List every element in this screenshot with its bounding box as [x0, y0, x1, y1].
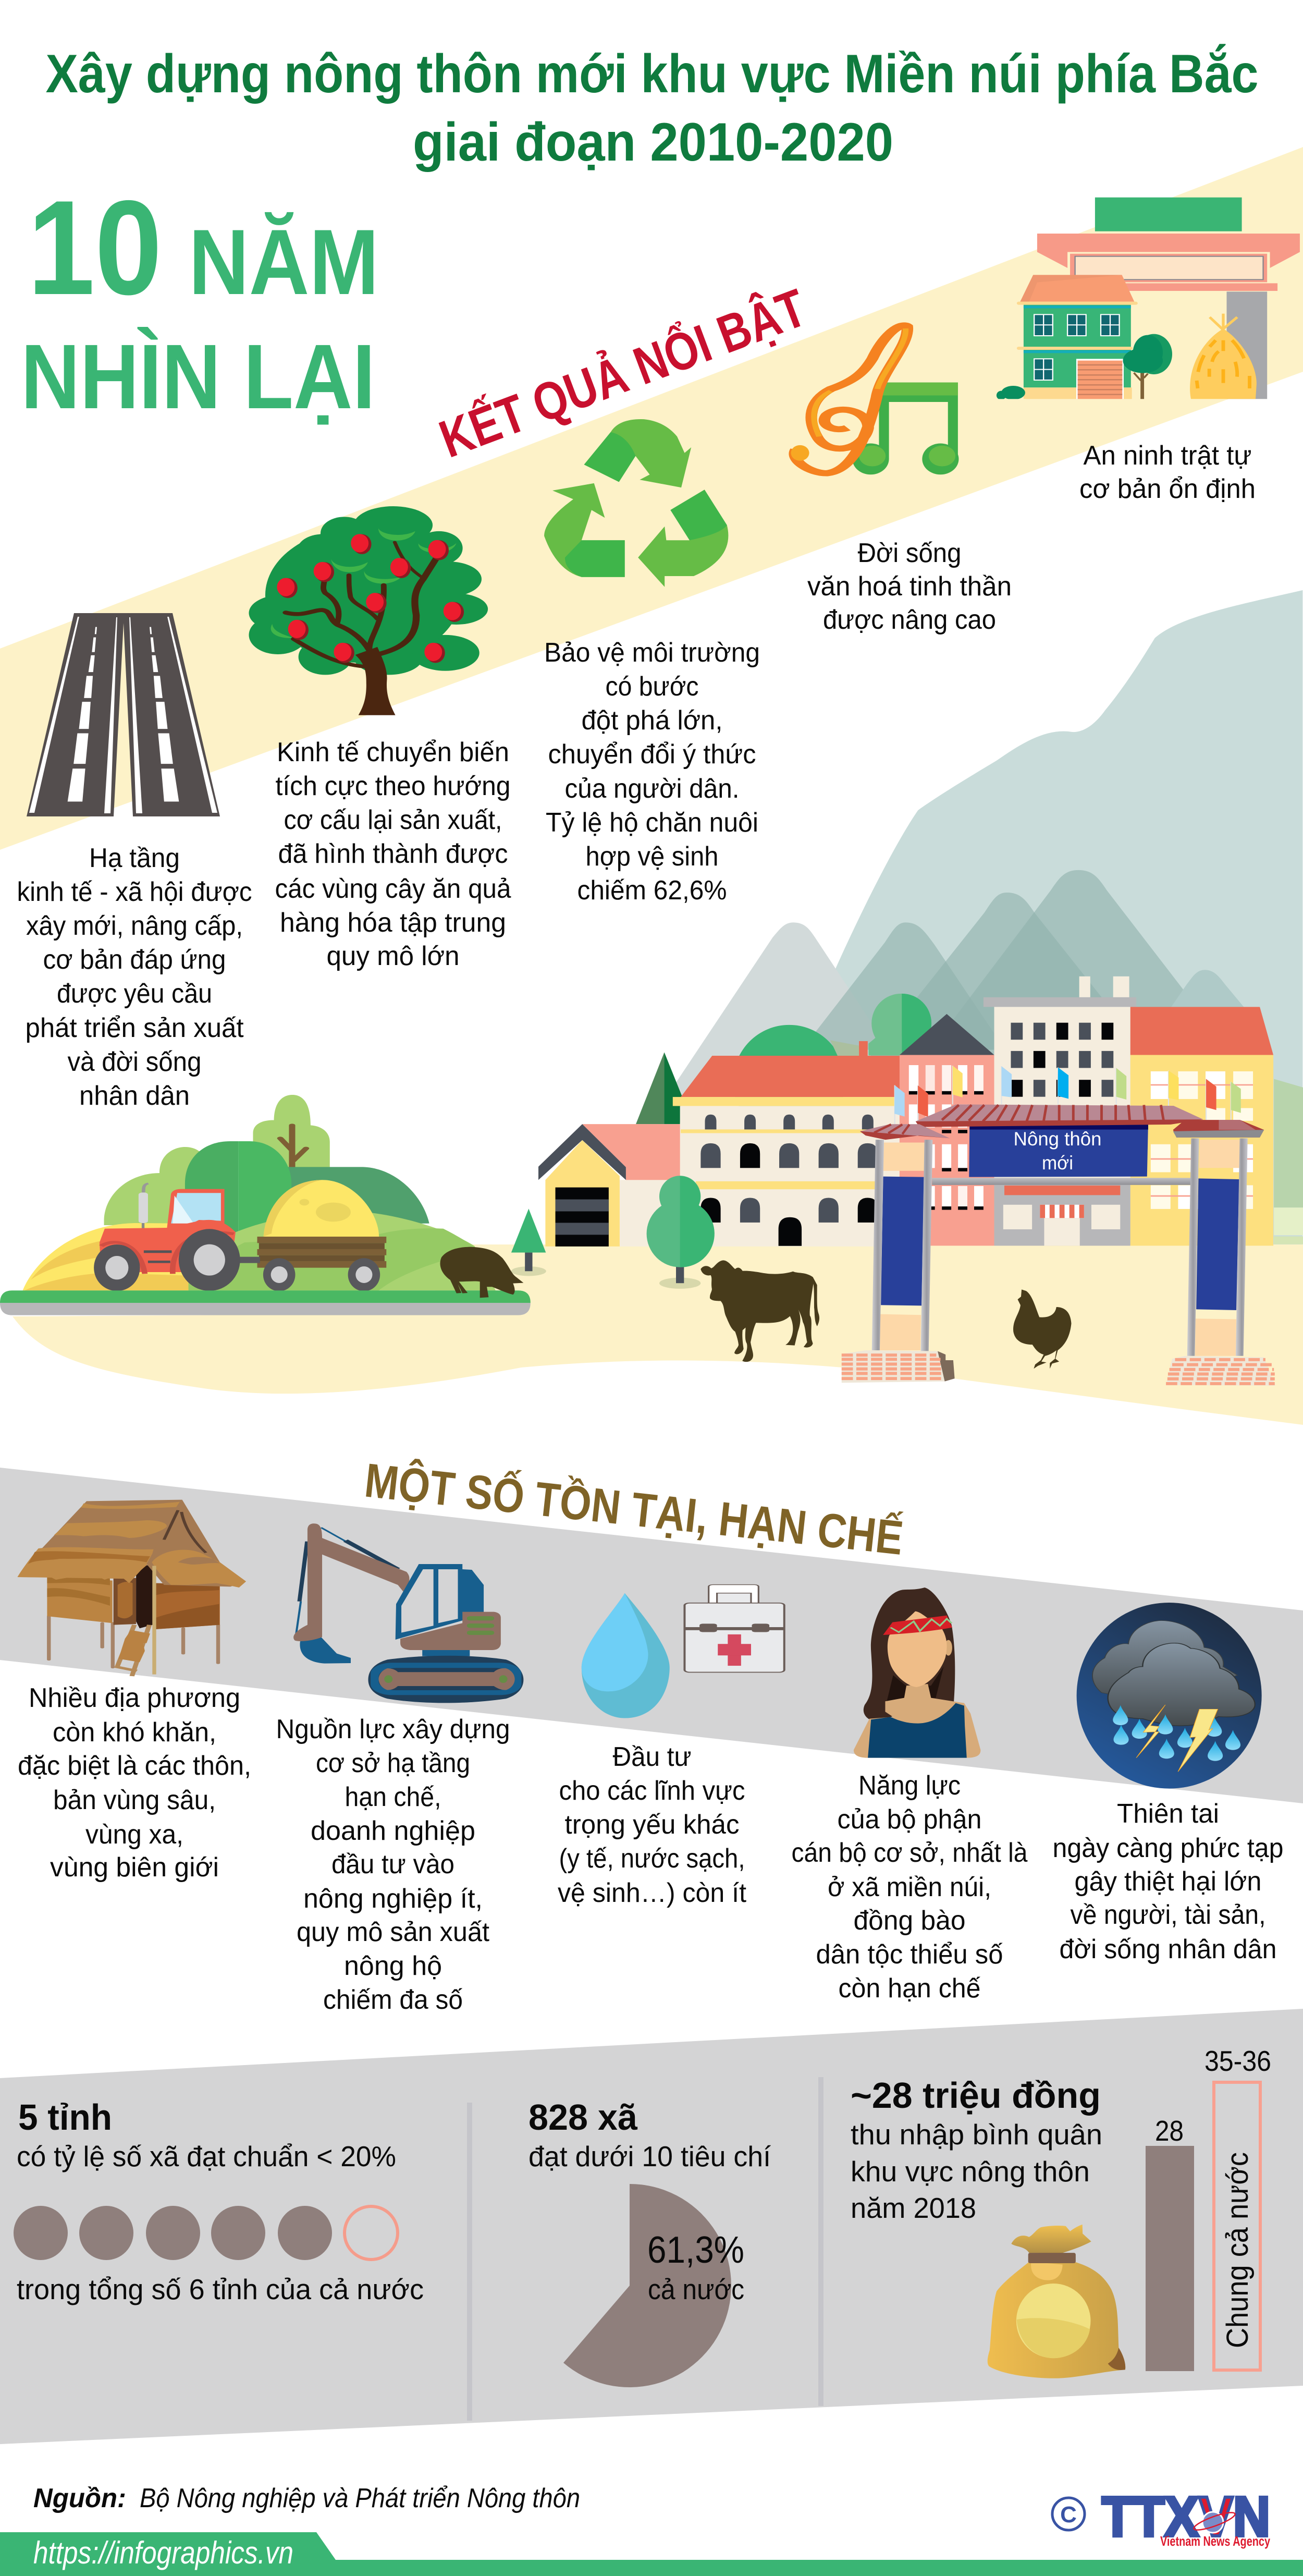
headline: 10 năm nhìn lại: 10 — [28, 172, 162, 323]
text: năng lực: của bộ phận — [837, 1804, 982, 1835]
text: nhiều địa phương: vùng biên giới — [50, 1852, 219, 1883]
flags — [894, 1066, 1241, 1124]
text: đầu tư — [558, 1742, 747, 1908]
text: năng lực — [791, 1771, 1028, 2004]
text: hạ tầng: xây mới, nâng cấp, — [26, 911, 243, 941]
panel: 828 xã: cả nước — [648, 2273, 744, 2305]
text: hạ tầng: kinh tế - xã hội được — [17, 877, 252, 907]
text: đời sống văn hoá — [807, 538, 1012, 635]
text: đầu tư: Đầu tư — [613, 1742, 691, 1772]
text: năng lực: Năng lực — [858, 1771, 961, 1801]
text: nguồn lực: hạn chế, — [345, 1782, 441, 1812]
title: giai đoạn 2010-2020 — [413, 112, 893, 173]
icon: excavator — [293, 1523, 523, 1703]
icon: storm — [1077, 1603, 1262, 1789]
icon: recycling arrows — [544, 419, 728, 587]
text: nguồn lực: chiếm đa số — [323, 1985, 463, 2015]
front tree — [511, 1176, 715, 1289]
text: bảo vệ môi trường: chuyển đổi ý thức — [548, 739, 756, 770]
gate sign text: mới — [1042, 1152, 1073, 1174]
source: Bộ Nông nghiệp và Phát triển Nông thôn — [140, 2483, 580, 2513]
text: nguồn lực: quy mô sản xuất — [297, 1917, 490, 1947]
footer bar: https://infographics.vn — [33, 2535, 293, 2570]
text: an ninh trật tự: cơ bản ổn định — [1079, 474, 1256, 504]
divider — [818, 2077, 823, 2406]
icon: stilt hut — [17, 1500, 246, 1676]
text: hạ tầng — [17, 843, 252, 1111]
text: nhiều địa phương: Nhiều địa phương — [29, 1683, 240, 1713]
text: hạ tầng: và đời sống — [68, 1047, 201, 1077]
text: hạ tầng: cơ bản đáp ứng — [43, 945, 226, 975]
panel: thu nhập bình quân: khu vực nông thôn — [851, 2155, 1090, 2188]
text: bảo vệ môi trường: của người dân. — [565, 774, 739, 804]
text: bảo vệ môi trường: Bảo vệ môi trường — [544, 638, 760, 668]
bar chart: income: 28 — [1155, 2115, 1184, 2147]
text: đầu tư: trọng yếu khác — [565, 1810, 739, 1840]
logo: TTXVN: TTXVN — [1102, 2485, 1270, 2548]
roofs — [916, 1104, 1203, 1126]
text: nhiều địa phương: bản vùng sâu, — [53, 1785, 216, 1815]
icon: toll gate, house and haystack — [996, 198, 1300, 401]
panel: 828 xã — [528, 2097, 771, 2387]
text: nhiều địa phương: còn khó khăn, — [53, 1717, 216, 1748]
text: nhiều địa phương — [18, 1683, 251, 1883]
panel: thu nhập bình quân: thu nhập bình quân — [851, 2118, 1102, 2151]
text: hạ tầng: nhân dân — [79, 1081, 190, 1111]
text: đầu tư: cho các lĩnh vực — [559, 1776, 745, 1806]
text: hạ tầng: được yêu cầu — [57, 979, 212, 1009]
text: nguồn lực: nông hộ — [344, 1951, 442, 1981]
text: bảo vệ môi trường — [544, 638, 760, 906]
text: năng lực: dân tộc thiểu số — [816, 1939, 1003, 1970]
text: kinh tế chuyển biến: quy mô lớn — [326, 941, 460, 971]
text: nguồn lực: đầu tư vào — [331, 1849, 454, 1879]
icon: money bag — [988, 2225, 1125, 2378]
text: đời sống văn hoá: được nâng cao — [823, 605, 996, 635]
text: đời sống văn hoá: văn hoá tinh thần — [807, 571, 1012, 602]
ground — [13, 1244, 1303, 1425]
text: thiên tai: đời sống nhân dân — [1059, 1934, 1277, 1964]
headline: 10 năm nhìn lại: NHÌN LẠI — [21, 326, 375, 428]
text: bảo vệ môi trường: Tỷ lệ hộ chăn nuôi — [546, 808, 758, 838]
background band: results — [0, 147, 1303, 850]
bar chart: income — [1146, 2045, 1271, 2371]
gate sign text: Nông thôn — [1013, 1128, 1102, 1150]
text: bảo vệ môi trường: hợp vệ sinh — [586, 841, 718, 872]
icon: cow — [700, 1260, 819, 1362]
gate sign text — [1013, 1128, 1102, 1174]
brick bases — [842, 1350, 1275, 1386]
panel: thu nhập bình quân: năm 2018 — [851, 2192, 976, 2224]
text: kinh tế chuyển biến: đã hình thành được — [278, 839, 508, 869]
icon: ethnic woman — [854, 1588, 980, 1758]
footer bar — [0, 2532, 1303, 2576]
sign board — [969, 1124, 1148, 1177]
icon: music notes — [791, 325, 958, 474]
panel: thu nhập bình quân — [851, 2045, 1271, 2378]
illustration: farm with tractor — [0, 1095, 531, 1315]
text: nhiều địa phương: vùng xa, — [85, 1820, 183, 1850]
town buildings — [868, 976, 1273, 1246]
text: bảo vệ môi trường: có bước — [606, 672, 698, 702]
text: đời sống văn hoá: Đời sống — [858, 538, 961, 568]
text: nguồn lực: cơ sở hạ tầng — [316, 1748, 470, 1778]
panel: 828 xã: đạt dưới 10 tiêu chí — [528, 2140, 771, 2172]
school building and garage — [538, 1025, 903, 1247]
icon: pig — [440, 1247, 523, 1298]
source: Nguồn: — [33, 2483, 126, 2513]
text: nguồn lực: doanh nghiệp — [311, 1816, 475, 1846]
text: năng lực: còn hạn chế — [838, 1973, 981, 2004]
text: an ninh trật tự — [1079, 441, 1256, 504]
heading: kết quả nổi bật: KẾT QUẢ NỔI BẬT — [432, 278, 814, 469]
text: kinh tế chuyển biến: hàng hóa tập trung — [280, 908, 506, 938]
text: an ninh trật tự: An ninh trật tự — [1083, 441, 1252, 471]
background bands: limitations and statistics — [0, 1468, 1303, 2444]
divider — [467, 2103, 472, 2421]
text: nguồn lực — [276, 1714, 510, 2015]
icon: hen — [1013, 1289, 1071, 1369]
text: nguồn lực: Nguồn lực xây dựng — [276, 1714, 510, 1744]
dot chart: 5 of 6 provinces — [14, 2206, 398, 2260]
panel: 5 tỉnh: trong tổng số 6 tỉnh của cả nước — [17, 2273, 424, 2305]
panel: 828 xã: 61,3% — [647, 2229, 744, 2271]
icon: water drop and medical kit — [582, 1585, 784, 1718]
text: hạ tầng: Hạ tầng — [89, 843, 180, 873]
mountains — [665, 590, 1302, 1247]
text: hạ tầng: phát triển sản xuất — [25, 1013, 244, 1043]
text: thiên tai — [1053, 1799, 1283, 1964]
right meadow — [1274, 1079, 1303, 1244]
text: nguồn lực: nông nghiệp ít, — [303, 1884, 483, 1914]
text: năng lực: cán bộ cơ sở, nhất là — [791, 1838, 1028, 1868]
text: đầu tư: vệ sinh…) còn ít — [558, 1878, 747, 1908]
illustration: village buildings — [511, 976, 1303, 1289]
logo: TTXVN: C — [1060, 2502, 1077, 2528]
logo: TTXVN: Vietnam News Agency — [1160, 2533, 1270, 2549]
panel: 828 xã: 828 xã — [528, 2097, 638, 2138]
panel: 5 tỉnh — [14, 2097, 424, 2305]
text: kinh tế chuyển biến: cơ cấu lại sản xuất, — [284, 805, 502, 835]
text: kinh tế chuyển biến: tích cực theo hướng — [275, 771, 511, 801]
headline: 10 năm nhìn lại — [21, 172, 379, 428]
panel: thu nhập bình quân: ~28 triệu đồng — [851, 2075, 1101, 2116]
text: năng lực: ở xã miền núi, — [828, 1872, 991, 1902]
heading: một số tồn tại, hạn chế: MỘT SỐ TỒN TẠI, HẠN CHẾ — [362, 1453, 906, 1565]
pie chart: 61,3% — [563, 2184, 731, 2387]
text: năng lực: đồng bào — [854, 1906, 965, 1936]
text: kinh tế chuyển biến — [275, 737, 511, 971]
panel: 5 tỉnh: có tỷ lệ số xã đạt chuẩn < 20% — [17, 2140, 396, 2172]
bar chart: income: 35-36 — [1204, 2045, 1271, 2077]
text: đầu tư: (y tế, nước sạch, — [559, 1844, 745, 1874]
icon: apple tree — [249, 506, 488, 715]
text: bảo vệ môi trường: chiếm 62,6% — [577, 875, 727, 906]
text: kinh tế chuyển biến: Kinh tế chuyển biến — [277, 737, 509, 767]
icon: village gate with flags — [842, 1066, 1275, 1386]
text: thiên tai: Thiên tai — [1117, 1799, 1219, 1829]
text: bảo vệ môi trường: đột phá lớn, — [582, 705, 722, 736]
text: nhiều địa phương: đặc biệt là các thôn, — [18, 1751, 251, 1781]
headline: 10 năm nhìn lại: NĂM — [189, 210, 379, 314]
text: thiên tai: về người, tài sản, — [1071, 1900, 1265, 1930]
bar chart: income: Chung cả nước — [1221, 2152, 1255, 2348]
panel: 5 tỉnh: 5 tỉnh — [18, 2097, 112, 2138]
title — [46, 44, 1258, 173]
icon: road — [27, 613, 220, 816]
text: kinh tế chuyển biến: các vùng cây ăn quả — [275, 874, 511, 904]
text: thiên tai: gây thiệt hại lớn — [1075, 1866, 1261, 1897]
ladder — [115, 1625, 150, 1676]
text: thiên tai: ngày càng phức tạp — [1053, 1833, 1283, 1863]
